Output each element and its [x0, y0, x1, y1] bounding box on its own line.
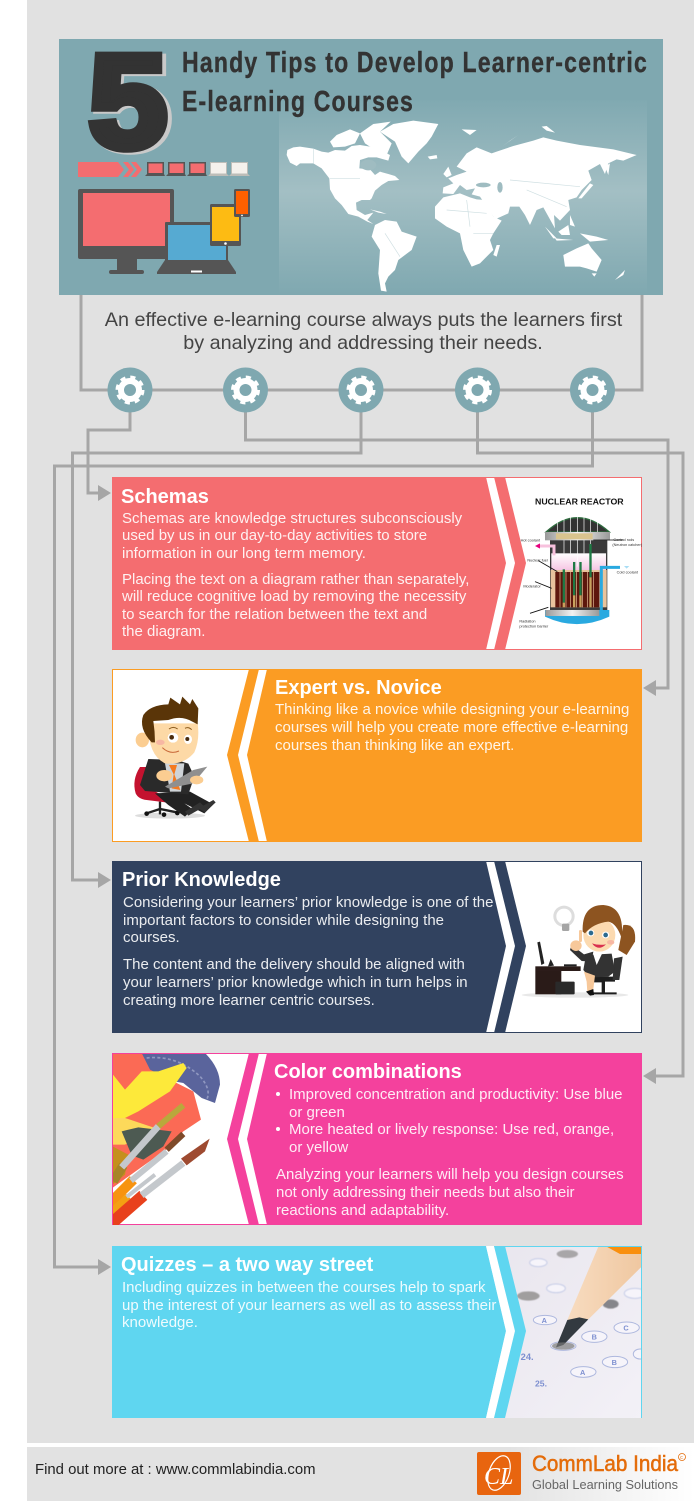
image: pencil on answer sheet: C: [623, 1324, 629, 1333]
connector frame: [81, 295, 642, 390]
logo mark: CL: [484, 1464, 513, 1490]
intro text: by analyzing and addressing their needs.: [183, 332, 543, 354]
image: pencil on answer sheet: A: [580, 1368, 586, 1377]
bullet list: or green: [289, 1104, 345, 1121]
image: nuclear reactor: Radiation: [519, 620, 536, 624]
icon: tablet: [210, 204, 241, 246]
image: nuclear reactor: Hot coolant: [521, 538, 541, 542]
text block: Including quizzes in between the courses help to spark: [122, 1279, 486, 1296]
text block: to search for the relation between the text and: [122, 606, 427, 623]
bullet list: More heated or lively response: Use red, orange,: [289, 1121, 614, 1138]
big number 5: 5: [89, 28, 167, 175]
bullet list: or yellow: [289, 1139, 348, 1156]
logo wordmark: [532, 1451, 686, 1492]
image: nuclear reactor: Control rods: [613, 538, 634, 542]
heading: Quizzes – a two way street: [121, 1254, 374, 1276]
icon: phone: [234, 189, 250, 217]
bullet list: Improved concentration and productivity: Use blue: [289, 1086, 623, 1103]
logo wordmark: CommLab India: [532, 1451, 679, 1476]
image: nuclear reactor: Cold coolant: [617, 570, 639, 574]
text block: the diagram.: [122, 623, 205, 640]
logo wordmark: Global Learning Solutions: [532, 1477, 678, 1492]
text block: important factors to consider while designing the: [123, 912, 444, 929]
big number 5: 5: [91, 30, 171, 177]
intro text: An effective e-learning course always puts the learners first: [105, 309, 623, 331]
text block: Considering your learners’ prior knowledge is one of the: [123, 894, 493, 911]
icon: gear 2: [223, 368, 268, 412]
intro text: [105, 309, 623, 354]
image: paint and brushes: [110, 1053, 220, 1225]
image: nuclear reactor: (Neutron catcher): [612, 543, 643, 547]
text block: will reduce cognitive load by removing the necessity: [121, 588, 467, 605]
connector: gear 5 to Quizzes: [54, 390, 592, 1275]
image: nuclear reactor: Nuclear fuel: [527, 559, 548, 563]
text block: knowledge.: [122, 1314, 198, 1331]
logo mark: [477, 1452, 521, 1495]
connector: gear 2 to Expert vs. Novice: [246, 390, 668, 696]
title: E-learning Courses: [182, 86, 414, 118]
text block: your learners’ prior knowledge which in turn helps in: [123, 974, 468, 991]
icon: gear 5: [570, 368, 615, 412]
text block: courses than thinking like an expert.: [275, 737, 514, 754]
text block: Placing the text on a diagram rather than separately,: [122, 571, 469, 588]
icon: laptop: [157, 222, 236, 274]
footer: [27, 1447, 694, 1501]
text block: courses will help you create more effective e-learning: [275, 719, 628, 736]
icon: monitor: [78, 189, 174, 274]
icon: progress arrow: [78, 162, 142, 177]
image: businesswoman at desk: [522, 905, 635, 998]
icon: mini laptops: [145, 162, 250, 176]
heading: Prior Knowledge: [122, 869, 281, 891]
image: pencil on answer sheet: B: [612, 1358, 617, 1367]
bullet list: [276, 1086, 623, 1156]
image: businessman with tablet: [134, 697, 216, 819]
text block: [123, 894, 493, 1009]
text block: reactions and adaptability.: [276, 1202, 449, 1219]
connector: gear 4 to Color combinations: [478, 390, 683, 1084]
heading: Color combinations: [274, 1061, 462, 1083]
panel: Color combinations: [110, 1053, 642, 1225]
image: pencil on answer sheet: A: [542, 1316, 548, 1325]
logo wordmark: c: [680, 1455, 683, 1461]
image: nuclear reactor: [519, 496, 643, 628]
connector: gear 1 to Schemas: [88, 390, 130, 501]
text block: Schemas are knowledge structures subconsciously: [122, 510, 463, 527]
connector: gear 3 to Prior Knowledge: [72, 390, 361, 888]
text block: Analyzing your learners will help you design courses: [276, 1166, 624, 1183]
world map: [279, 100, 647, 295]
text block: Thinking like a novice while designing your e-learning: [275, 701, 629, 718]
text block: creating more learner centric courses.: [123, 992, 375, 1009]
icon: gear 1: [108, 368, 152, 412]
footer link text: Find out more at : www.commlabindia.com: [35, 1462, 316, 1478]
image: nuclear reactor: protection barrier: [519, 624, 549, 628]
text block: [122, 1279, 496, 1331]
banner: [59, 28, 663, 295]
icon: gear 3: [338, 368, 384, 412]
text block: [276, 1166, 624, 1219]
text block: [121, 510, 469, 640]
image: pencil on answer sheet: 24.: [521, 1352, 534, 1362]
text block: The content and the delivery should be aligned with: [123, 956, 465, 973]
text block: not only addressing their needs but also their: [276, 1184, 575, 1201]
panel: Schemas: [112, 477, 643, 650]
text block: information in our long term memory.: [122, 545, 366, 562]
text block: used by us in our day-to-day activities to store: [122, 527, 427, 544]
text block: [275, 701, 629, 754]
title: [182, 47, 648, 118]
image: pencil on answer sheet: B: [592, 1332, 597, 1341]
panel: Prior Knowledge: [112, 861, 642, 1033]
image: nuclear reactor: NUCLEAR REACTOR: [535, 496, 624, 506]
panel: Expert vs. Novice: [112, 669, 642, 842]
icon: gear 4: [455, 368, 500, 412]
heading: Expert vs. Novice: [275, 677, 442, 699]
text block: up the interest of your learners as well as to assess their: [122, 1297, 496, 1314]
image: nuclear reactor: Moderator: [523, 585, 542, 589]
panel: Quizzes: [112, 1246, 647, 1420]
image: pencil on answer sheet: 25.: [535, 1379, 547, 1389]
heading: Schemas: [121, 486, 209, 508]
image: pencil on answer sheet: [490, 1247, 647, 1420]
text block: courses.: [123, 929, 180, 946]
